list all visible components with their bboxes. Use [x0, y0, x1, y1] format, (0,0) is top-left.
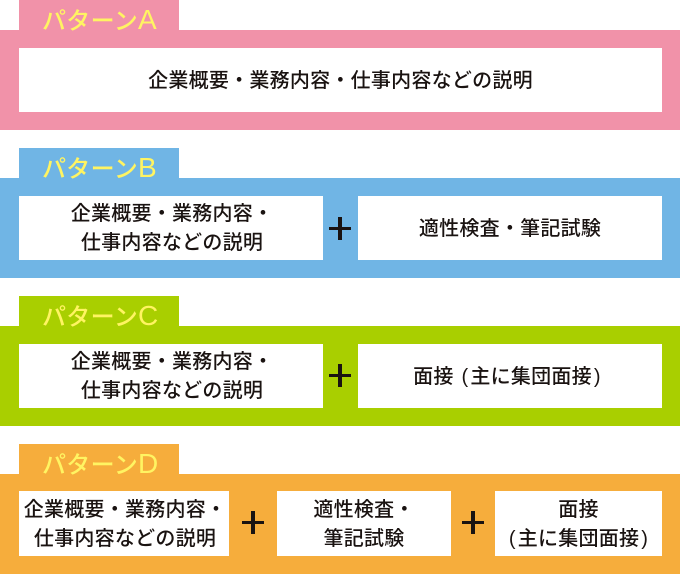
panel: pattern B: [0, 148, 680, 278]
icon: plus: [329, 217, 351, 240]
text box: company overview: 仕事内容などの説明: [81, 380, 263, 402]
text box: aptitude test: [277, 491, 451, 556]
tab: pattern B heading: [19, 148, 179, 179]
panel: pattern D: [0, 444, 680, 574]
text box: company overview: [19, 196, 323, 260]
text box: interview: [495, 491, 662, 556]
text box: company overview: 企業概要・業務内容・: [24, 498, 226, 520]
text box: company overview: 仕事内容などの説明: [81, 232, 263, 254]
tab: pattern A heading: [19, 0, 179, 31]
text box: aptitude test: 筆記試験: [324, 528, 404, 550]
tab: pattern C heading: [19, 296, 179, 327]
tab: pattern B heading: パターンB: [42, 152, 157, 183]
tab: pattern C heading: パターンC: [42, 300, 159, 331]
band: pattern C background: [0, 326, 680, 426]
icon: plus: [242, 511, 264, 534]
text box: aptitude test: 適性検査・: [313, 498, 415, 520]
text box: interview: 面接 (主に集団面接): [413, 366, 601, 388]
text box: company overview: [19, 491, 229, 556]
tab: pattern D heading: [19, 444, 179, 475]
text box: interview: [358, 344, 662, 408]
text box: aptitude test: [358, 196, 662, 260]
text box: company overview: 企業概要・業務内容・: [71, 351, 273, 373]
panel: pattern C: [0, 296, 680, 426]
text box: company overview: 企業概要・業務内容・: [71, 203, 273, 225]
band: pattern D background: [0, 474, 680, 574]
icon: plus: [329, 364, 351, 387]
text box: company overview: 企業概要・業務内容・仕事内容などの説明: [148, 70, 533, 92]
text box: aptitude test: 適性検査・筆記試験: [419, 218, 601, 240]
band: pattern B background: [0, 178, 680, 278]
text box: company overview: [19, 344, 323, 408]
tab: pattern A heading: パターンA: [42, 4, 157, 35]
text box: interview: (主に集団面接): [509, 528, 648, 550]
band: pattern A background: [0, 30, 680, 130]
text box: company overview: 仕事内容などの説明: [34, 528, 216, 550]
tab: pattern D heading: パターンD: [42, 448, 159, 479]
text box: interview: 面接: [558, 498, 599, 520]
icon: plus: [462, 511, 484, 534]
text box: company overview: [19, 48, 662, 112]
panel: pattern A: [0, 0, 680, 130]
